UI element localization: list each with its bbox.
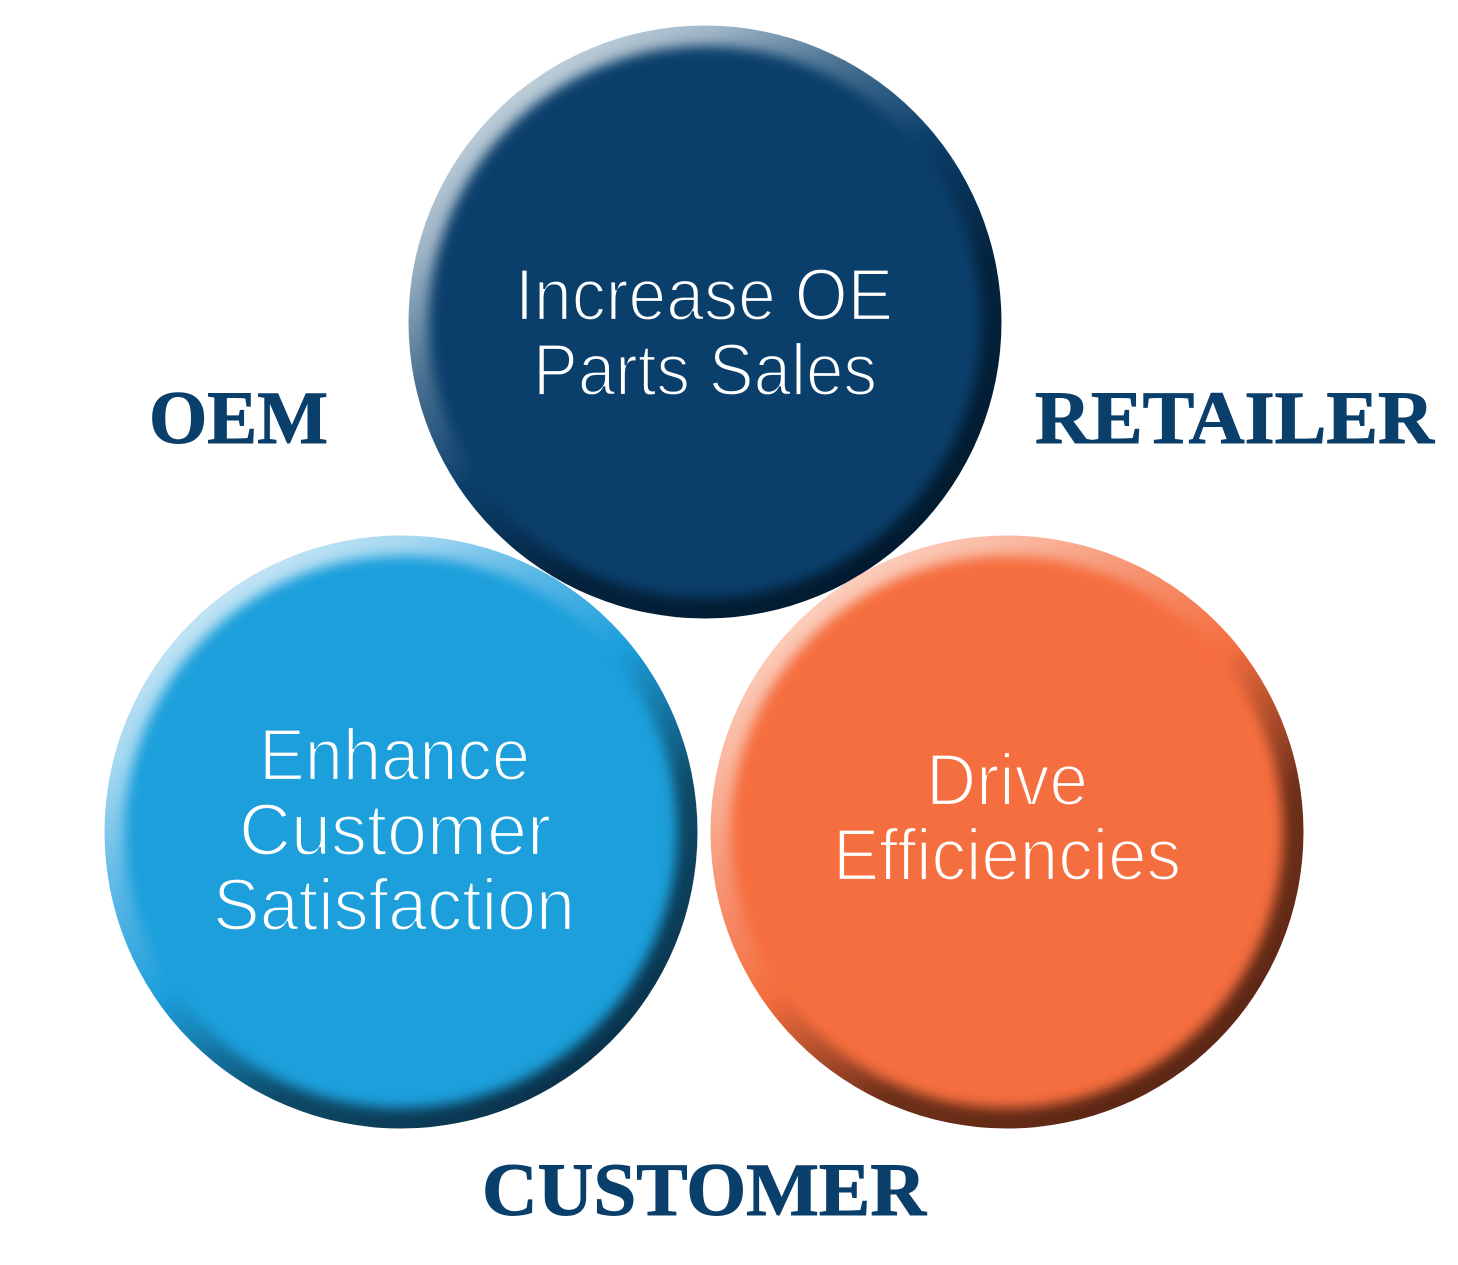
text: Enhance Customer Satisfaction: [213, 715, 575, 946]
text: Enhance Customer Satisfaction: Enhance: [259, 715, 530, 796]
text: Increase OE Parts Sales: Parts Sales: [533, 330, 877, 411]
text: Drive Efficiencies: Efficiencies: [833, 815, 1181, 896]
label: OEM: OEM: [149, 377, 328, 460]
text: Drive Efficiencies: [833, 740, 1181, 896]
text: Enhance Customer Satisfaction: Customer: [239, 790, 551, 871]
panel: customer satisfaction circle: [104, 536, 698, 1128]
text: Increase OE Parts Sales: Increase OE: [515, 255, 893, 336]
panel: OE parts sales circle: [408, 26, 1002, 618]
panel: drive efficiencies circle: [710, 536, 1304, 1128]
text: Drive Efficiencies: Drive: [926, 740, 1088, 821]
label: RETAILER: RETAILER: [1035, 377, 1435, 460]
label: CUSTOMER: CUSTOMER: [482, 1149, 927, 1232]
text: Enhance Customer Satisfaction: Satisfaction: [213, 865, 575, 946]
text: Increase OE Parts Sales: [515, 255, 893, 411]
